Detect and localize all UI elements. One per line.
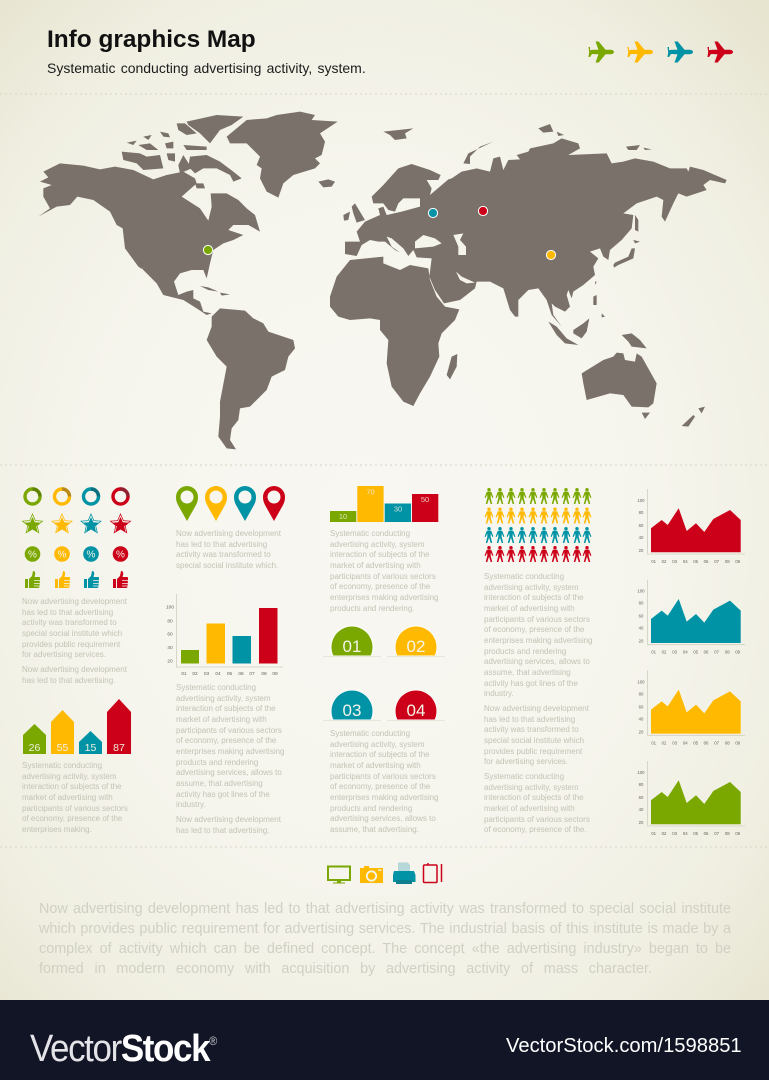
area chart: green: 60 — [639, 795, 644, 800]
text block: column 2 bottom: has led to that advertising. — [176, 826, 269, 835]
text block: column 2 middle: market of advertising with — [176, 715, 267, 724]
percent icons: % — [28, 550, 37, 560]
text block: column 2 top: has led to that advertising — [176, 540, 267, 549]
bar chart: 02 — [192, 671, 198, 677]
text block: column 3 top: Systematic conducting — [330, 529, 410, 538]
text block: column 2 middle: participants of various sectors — [176, 726, 282, 735]
area chart: green: 01 — [651, 831, 657, 836]
text block: column 1 top: for advertising services. — [22, 650, 106, 659]
area chart: yellow — [637, 670, 745, 745]
area chart: green: 04 — [683, 831, 688, 836]
area chart: yellow: 40 — [639, 716, 644, 721]
text block: column 4 top: of economy, presence of the — [484, 625, 584, 634]
bar chart — [166, 594, 283, 677]
text block: column 4 bottom — [484, 772, 590, 834]
map markers — [203, 206, 556, 260]
marker: red — [478, 206, 488, 216]
area chart: red: 80 — [639, 510, 644, 515]
ring icons — [25, 489, 128, 504]
bottom paragraph: formed in modern economy with acquisition by advertising activity of mass character. — [39, 961, 652, 977]
text block: column 4 middle: has led to that advertising — [484, 715, 575, 724]
area chart: green: 20 — [639, 820, 644, 825]
text block: column 4 top: products and rendering — [484, 647, 566, 656]
area chart: green: 80 — [639, 782, 644, 787]
text block: column 2 top: special social institute which. — [176, 561, 278, 570]
text block: column 4 top: advertising activity, system — [484, 583, 579, 592]
area chart: teal: 40 — [639, 626, 644, 631]
text block: column 4 top: assume, that advertising — [484, 668, 571, 677]
text block: column 1 middle: has led to that advertising. — [22, 676, 115, 685]
icon: red plane — [708, 42, 733, 62]
area chart: teal: 02 — [662, 650, 667, 655]
area chart: teal: 20 — [639, 639, 644, 644]
text block: column 4 bottom: interaction of subjects of the — [484, 793, 584, 802]
text block: column 2 middle: interaction of subjects of the — [176, 704, 276, 713]
text block: column 3 bottom: enterprises making advertising — [330, 793, 438, 802]
text block: column 3 top: interaction of subjects of the — [330, 550, 430, 559]
text block: column 2 middle: products and rendering — [176, 758, 258, 767]
area chart: red: 05 — [693, 559, 699, 564]
text block: column 4 top: participants of various sectors — [484, 615, 590, 624]
house-shaped bar chart: 87 — [113, 742, 125, 754]
text block: column 2 middle: advertising services, allows to — [176, 768, 282, 777]
text block: column 1 top: Now advertising development — [22, 597, 127, 606]
text block: column 2 middle: advertising activity, system — [176, 694, 271, 703]
bar chart: 100 — [166, 604, 174, 610]
area chart: yellow: 05 — [693, 740, 699, 745]
bar chart: 08 — [261, 671, 267, 677]
stepped bar chart: 50 — [421, 495, 429, 504]
text block: column 4 middle — [484, 704, 589, 766]
bottom paragraph: complex of activity which can be defined concept. The concept «the advertising industry» began to be — [39, 941, 731, 957]
location pin icons — [176, 486, 285, 521]
text block: column 2 middle: Systematic conducting — [176, 683, 256, 692]
area chart: red: 04 — [683, 559, 688, 564]
area chart: yellow: 07 — [714, 740, 720, 745]
icon: teal plane — [668, 42, 693, 62]
text block: column 1 bottom: interaction of subjects of the — [22, 782, 122, 791]
text block: column 2 middle: industry. — [176, 800, 206, 809]
text block: column 2 bottom — [176, 815, 281, 835]
house-shaped bar chart: 15 — [85, 742, 96, 754]
area chart: red — [637, 489, 745, 564]
text block: column 1 top: provides public requirement — [22, 640, 120, 649]
text block: column 4 bottom: of economy, presence of the. — [484, 825, 587, 834]
text block: column 4 top: interaction of subjects of the — [484, 593, 584, 602]
area chart: yellow: 04 — [683, 740, 688, 745]
bar chart: 01 — [181, 671, 187, 677]
text block: column 3 top: advertising activity, system — [330, 540, 425, 549]
text block: column 4 top: enterprises making advertising — [484, 636, 592, 645]
icon: yellow plane — [628, 42, 653, 62]
map: Americas and Arctic — [38, 112, 338, 449]
text block: column 3 bottom: of economy, presence of the — [330, 782, 430, 791]
stepped bar chart: 70 — [366, 488, 375, 496]
text block: column 2 bottom: Now advertising development — [176, 815, 281, 824]
text block: column 4 middle: provides public requirement — [484, 747, 582, 756]
text block: column 4 bottom: Systematic conducting — [484, 772, 564, 781]
area chart: teal: 07 — [714, 650, 720, 655]
area chart: green: 09 — [735, 831, 741, 836]
text block: column 1 middle: Now advertising development — [22, 665, 127, 674]
text block: column 4 bottom: market of advertising with — [484, 804, 575, 813]
text block: column 2 top: Now advertising development — [176, 529, 281, 538]
area chart: green — [637, 761, 745, 836]
area chart: teal: 04 — [683, 650, 688, 655]
text block: column 3 bottom: interaction of subjects of the — [330, 750, 430, 759]
text block: column 3 bottom — [330, 729, 438, 834]
text block: column 3 top: enterprises making advertising — [330, 593, 438, 602]
area chart: teal — [637, 580, 745, 655]
title: Info graphics Map — [47, 26, 256, 53]
icon: green plane — [588, 42, 614, 62]
footer logo: VectorStock® — [30, 1028, 217, 1070]
icon: monitor — [327, 866, 351, 884]
stepped bar chart — [330, 486, 438, 522]
area chart: yellow: 02 — [662, 740, 667, 745]
area chart: teal: 03 — [672, 650, 678, 655]
text block: column 3 bottom: assume, that advertising. — [330, 825, 419, 834]
footer image id: VectorStock.com/1598851 — [506, 1035, 742, 1057]
house-shaped bar chart: 55 — [57, 742, 68, 754]
text block: column 1 middle — [22, 665, 127, 685]
area chart: yellow: 03 — [672, 740, 678, 745]
text block: column 2 top — [176, 529, 281, 570]
text block: column 2 middle: activity has got lines of the — [176, 790, 270, 799]
text block: column 3 top: market of advertising with — [330, 561, 421, 570]
area chart: red: 07 — [714, 559, 720, 564]
area chart: teal: 80 — [639, 601, 644, 606]
area chart: yellow: 06 — [704, 740, 709, 745]
text block: column 4 top: market of advertising with — [484, 604, 575, 613]
bar chart: 80 — [167, 618, 173, 624]
text block: column 3 bottom: Systematic conducting — [330, 729, 410, 738]
text block: column 1 bottom — [22, 761, 128, 834]
area chart: teal: 09 — [735, 650, 741, 655]
area chart: green: 02 — [662, 831, 667, 836]
icon: tablet — [424, 863, 442, 882]
text block: column 1 bottom: market of advertising with — [22, 793, 113, 802]
area chart: teal: 100 — [637, 589, 645, 594]
text block: column 4 middle: activity was transformed to — [484, 725, 579, 734]
bar chart: 03 — [204, 671, 209, 677]
badge 02: 02 — [407, 637, 425, 656]
text block: column 1 top: special social institute which — [22, 629, 122, 638]
text block: column 4 middle: special social institute which — [484, 736, 584, 745]
text block: column 3 bottom: advertising services, allows to — [330, 814, 436, 823]
area chart: red: 40 — [639, 535, 644, 540]
bottom paragraph — [39, 901, 731, 977]
area chart: yellow: 20 — [639, 729, 644, 734]
map: Eurasia, Africa and Oceania — [330, 124, 727, 427]
text block: column 2 middle — [176, 683, 284, 809]
area chart: yellow: 60 — [639, 704, 644, 709]
marker: yellow — [546, 250, 556, 260]
marker: green — [203, 245, 213, 255]
text block: column 1 bottom: of economy, presence of the — [22, 814, 122, 823]
text block: column 3 bottom: participants of various sectors — [330, 772, 436, 781]
bar chart: 05 — [227, 671, 232, 677]
area chart: yellow: 100 — [637, 679, 645, 684]
area chart: red: 01 — [651, 559, 657, 564]
area chart: red: 60 — [639, 523, 644, 528]
area chart: green: 100 — [637, 770, 645, 775]
badge 04: 04 — [407, 701, 425, 720]
house-shaped bar chart — [23, 699, 131, 754]
bar chart: 40 — [167, 645, 173, 651]
area chart: green: 06 — [704, 831, 709, 836]
area chart: red: 03 — [672, 559, 678, 564]
subtitle: Systematic conducting advertising activity, system. — [47, 60, 366, 76]
text block: column 4 bottom: advertising activity, system — [484, 783, 579, 792]
star icons — [22, 514, 130, 533]
badge 03: 03 — [343, 701, 361, 720]
text block: column 4 bottom: participants of various sectors — [484, 815, 590, 824]
bar chart: 09 — [272, 671, 278, 677]
bottom paragraph: Now advertising development has led to that advertising activity was transformed to special social institute — [39, 901, 731, 917]
text block: column 1 top: activity was transformed to — [22, 618, 117, 627]
text block: column 3 top — [330, 529, 438, 613]
world map — [38, 112, 727, 449]
text block: column 4 top: industry. — [484, 689, 514, 698]
icon: camera — [360, 866, 383, 883]
text block: column 4 middle: for advertising services. — [484, 757, 568, 766]
house-shaped bar chart: 26 — [29, 742, 40, 754]
area chart: red: 02 — [662, 559, 667, 564]
area chart: teal: 60 — [639, 614, 644, 619]
text block: column 2 middle: of economy, presence of the — [176, 736, 276, 745]
text block: column 4 middle: Now advertising development — [484, 704, 589, 713]
text block: column 3 top: participants of various sectors — [330, 572, 436, 581]
marker: teal — [428, 208, 438, 218]
area chart: green: 05 — [693, 831, 699, 836]
stepped bar chart: 10 — [339, 512, 347, 521]
text block: column 3 top: products and rendering. — [330, 604, 414, 613]
text block: column 4 top: advertising services, allows to — [484, 657, 590, 666]
bar chart: 04 — [215, 671, 221, 677]
area chart: yellow: 08 — [725, 740, 730, 745]
text block: column 1 bottom: advertising activity, system — [22, 772, 117, 781]
plane icons — [588, 42, 733, 62]
people pictogram — [485, 488, 591, 562]
badge 01: 01 — [343, 637, 361, 656]
bottom paragraph: which provides public requirement for advertising services. The industrial basis of this institute is made by a — [39, 921, 731, 937]
text block: column 2 middle: enterprises making advertising — [176, 747, 284, 756]
area chart: yellow: 80 — [639, 691, 644, 696]
area chart: red: 09 — [735, 559, 741, 564]
area chart: green: 08 — [725, 831, 730, 836]
percent icons: % — [87, 550, 96, 560]
text block: column 2 middle: assume, that advertising — [176, 779, 263, 788]
area chart: yellow: 09 — [735, 740, 741, 745]
area chart: green: 07 — [714, 831, 720, 836]
text block: column 3 bottom: products and rendering — [330, 804, 412, 813]
text block: column 1 bottom: enterprises making. — [22, 825, 92, 834]
bar chart: 07 — [249, 671, 255, 677]
percent icons: % — [58, 550, 67, 560]
percent icons: % — [116, 550, 125, 560]
area chart: red: 08 — [725, 559, 730, 564]
area chart: green: 40 — [639, 807, 644, 812]
text block: column 3 bottom: advertising activity, system — [330, 740, 425, 749]
stepped bar chart: 30 — [394, 504, 402, 514]
area chart: red: 100 — [637, 498, 645, 503]
text block: column 1 top — [22, 597, 127, 659]
bar chart: 20 — [167, 658, 173, 664]
text block: column 1 bottom: Systematic conducting — [22, 761, 102, 770]
text block: column 3 top: of economy, presence of the — [330, 582, 430, 591]
area chart: teal: 08 — [725, 650, 730, 655]
text block: column 2 top: activity was transformed to — [176, 550, 271, 559]
text block: column 4 top: activity has got lines of the — [484, 679, 578, 688]
text block: column 1 top: has led to that advertising — [22, 608, 113, 617]
area chart: teal: 06 — [704, 650, 709, 655]
thumbs-up icons — [25, 571, 128, 588]
bar chart: 06 — [238, 671, 244, 677]
percent icons — [25, 546, 128, 562]
area chart: teal: 01 — [651, 650, 657, 655]
numbered semicircle badges — [323, 626, 445, 721]
text block: column 4 top — [484, 572, 592, 698]
area chart: red: 06 — [704, 559, 709, 564]
text block: column 3 bottom: market of advertising with — [330, 761, 421, 770]
text block: column 4 top: Systematic conducting — [484, 572, 564, 581]
area chart: red: 20 — [639, 548, 644, 553]
icon: printer — [393, 862, 416, 884]
text block: column 1 bottom: participants of various sectors — [22, 804, 128, 813]
bar chart: 60 — [167, 632, 173, 638]
footer bar — [0, 1000, 769, 1080]
area chart: yellow: 01 — [651, 740, 657, 745]
area chart: green: 03 — [672, 831, 678, 836]
area chart: teal: 05 — [693, 650, 699, 655]
